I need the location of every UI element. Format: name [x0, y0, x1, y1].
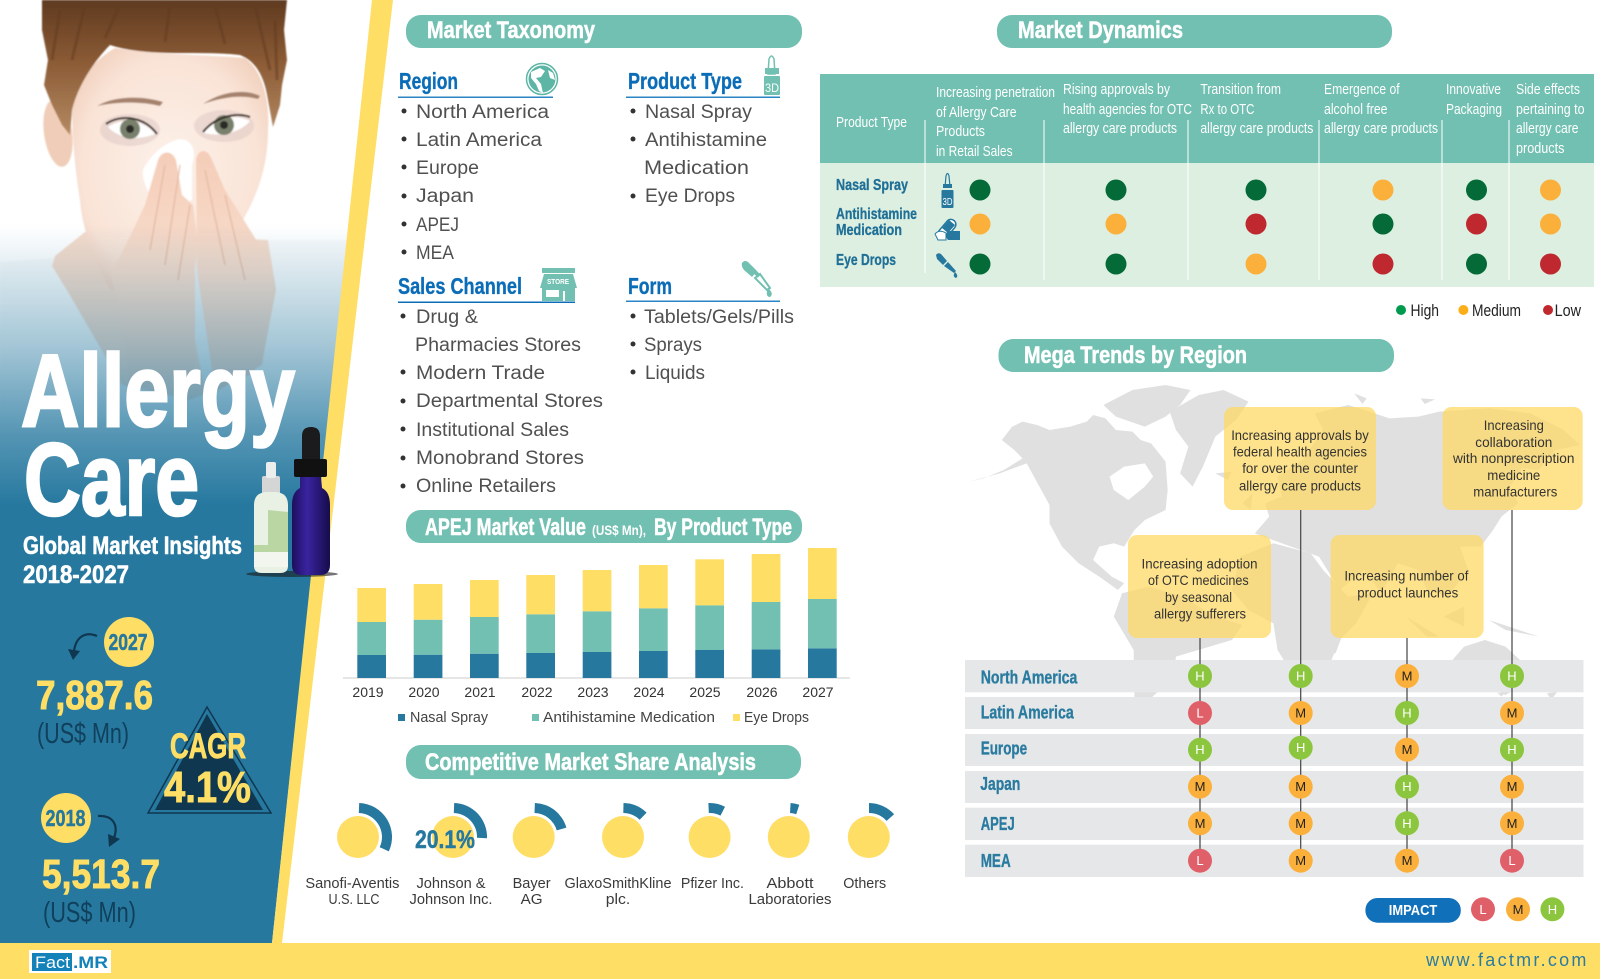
table header labels: Side effects — [1516, 81, 1580, 98]
callout: approvals by federal health agencies: federal health agencies — [1233, 444, 1367, 460]
impact row: Japan: M — [1195, 779, 1205, 794]
list: regions: MEA — [416, 243, 454, 264]
x axis years: 2020 — [408, 684, 440, 700]
arrow: curved to 2027 value — [68, 634, 97, 660]
list: product types: Medication — [644, 158, 749, 179]
table header labels — [836, 81, 1584, 160]
list: sales channels: Departmental Stores — [416, 391, 603, 412]
impact row: APEJ — [1188, 811, 1524, 835]
impact row: Latin America — [1188, 701, 1524, 725]
heading: Mega Trends by Region: Mega Trends by Region — [1024, 342, 1247, 369]
region labels: MEA — [981, 851, 1011, 871]
logo: Fact.MR — [29, 950, 111, 973]
donut: Johnson and Johnson: Johnson & — [416, 875, 486, 892]
list: regions: APEJ — [416, 215, 459, 236]
panel: Region: Region — [399, 68, 458, 94]
table row labels: Antihistamine — [836, 206, 917, 223]
callout: collaboration with manufacturers: with nonprescription — [1452, 450, 1574, 466]
x axis years: 2021 — [464, 684, 496, 700]
2018 badge: 2018 — [46, 805, 86, 831]
subtitle: 2018-2027 — [23, 561, 129, 589]
impact row: North America: H — [1296, 668, 1305, 684]
heading: APEJ Market Value — [406, 510, 802, 543]
list: sales channels: Institutional Sales — [416, 420, 569, 441]
legend: High Medium Low: High — [1410, 301, 1439, 320]
impact row: MEA: M — [1295, 853, 1306, 868]
callout: collaboration with manufacturers — [1442, 407, 1583, 510]
donut: Bayer: Bayer — [513, 875, 551, 892]
list: forms: Liquids — [645, 363, 705, 384]
impact row: Japan — [1188, 775, 1524, 799]
list: product types: Antihistamine — [645, 130, 767, 151]
callout: collaboration with manufacturers: medicine — [1487, 467, 1540, 483]
impact row: Latin America: L — [1196, 706, 1204, 720]
icon: nasal spray: 3D — [942, 197, 952, 208]
table header labels: health agencies for OTC — [1063, 101, 1192, 118]
callout: approvals by federal health agencies: allergy care products — [1239, 478, 1361, 494]
impact row: MEA: L — [1508, 853, 1516, 868]
table header labels: Emergence of — [1324, 81, 1400, 98]
impact row: Europe: H — [1507, 742, 1517, 757]
impact row: Japan: M — [1507, 779, 1517, 794]
callout: product launches — [1331, 535, 1484, 638]
list: sales channels: Modern Trade — [416, 363, 545, 384]
table header labels: Packaging — [1446, 101, 1502, 118]
impact row: Japan: M — [1295, 779, 1306, 794]
stat: 2027 value: (US$ Mn) — [37, 718, 129, 750]
callout: CAGR triangle: CAGR — [170, 727, 246, 766]
callout: adoption of OTC medicines — [1128, 535, 1271, 638]
donut: Sanofi-Aventis: U.S. LLC — [328, 891, 380, 908]
impact row: Japan: H — [1402, 779, 1412, 794]
connector lines — [1199, 510, 1513, 860]
region labels: North America — [981, 667, 1078, 687]
panel: Sales Channel — [398, 268, 603, 497]
impact row: Europe: M — [1402, 742, 1412, 757]
callout: approvals by federal health agencies: for over the counter — [1242, 460, 1358, 476]
subtitle: Global Market Insights — [23, 532, 242, 560]
heading: APEJ Market Value: APEJ Market Value — [425, 514, 586, 541]
x axis years: 2027 — [802, 684, 834, 700]
2027 badge: 2027 — [108, 629, 148, 655]
impact row: MEA: M — [1402, 853, 1412, 868]
impact row: Europe: H — [1296, 740, 1305, 755]
title: Allergy Care: Allergy — [21, 333, 295, 448]
table header labels: Increasing penetration — [936, 84, 1055, 101]
list: sales channels: Monobrand Stores — [416, 448, 584, 469]
legend: impact — [1365, 897, 1564, 923]
icon: store — [540, 268, 577, 301]
panel: Product Type — [626, 56, 780, 207]
stat: 2018 value: 5,513.7 — [42, 851, 160, 897]
panel: region rows — [965, 660, 1584, 877]
legend: impact: IMPACT — [1389, 902, 1437, 919]
callout: product launches: Increasing number of — [1344, 568, 1468, 584]
panel: Sales Channel: Sales Channel — [398, 273, 522, 299]
heading: Competitive Market Share Analysis: Competitive Market Share Analysis — [425, 749, 756, 776]
region labels: APEJ — [981, 814, 1015, 834]
impact row: Europe: H — [1195, 742, 1205, 757]
impact row: Latin America: M — [1295, 706, 1306, 720]
chart legend — [398, 709, 809, 726]
region labels: Japan — [980, 774, 1020, 794]
heading: Market Taxonomy — [406, 15, 802, 48]
heading: Market Taxonomy: Market Taxonomy — [427, 17, 596, 44]
chart legend: Antihistamine Medication — [543, 709, 715, 726]
x axis years: 2022 — [521, 684, 553, 700]
x axis years: 2025 — [689, 684, 721, 700]
map: world background — [969, 385, 1580, 700]
callout: adoption of OTC medicines: by seasonal — [1165, 589, 1232, 605]
bar chart: APEJ market value — [343, 548, 850, 726]
heading: Mega Trends by Region — [998, 339, 1394, 372]
stat: 2018 value: (US$ Mn) — [43, 897, 136, 929]
table: market dynamics — [820, 74, 1594, 287]
list: product types: Eye Drops — [645, 186, 735, 207]
callout: product launches: product launches — [1357, 585, 1458, 601]
donut: Sanofi-Aventis — [305, 803, 399, 908]
heading: APEJ Market Value: By Product Type — [654, 514, 792, 541]
region labels: Europe — [981, 739, 1027, 759]
panel: Form — [626, 261, 794, 384]
list: forms: Sprays — [644, 335, 702, 356]
table header labels: Product Type — [836, 114, 907, 131]
table header labels: allergy care products — [1063, 120, 1177, 137]
list: sales channels — [400, 307, 603, 497]
impact row: North America: H — [1195, 668, 1205, 684]
list: regions: Europe — [416, 158, 479, 179]
impact row: Latin America: H — [1402, 706, 1412, 720]
impact row: North America: M — [1402, 668, 1412, 684]
impact row: APEJ: H — [1402, 816, 1412, 831]
footer bar — [0, 943, 1600, 979]
impact row: APEJ: M — [1195, 816, 1205, 831]
donut: Johnson and Johnson — [410, 803, 492, 908]
panel: Product Type: Product Type — [628, 68, 742, 94]
table header labels: pertaining to — [1516, 101, 1584, 118]
callout: adoption of OTC medicines: Increasing adoption — [1142, 556, 1258, 572]
icon: globe — [526, 64, 558, 94]
icon: nasal spray bottle: 3D — [765, 81, 779, 95]
callout: collaboration with manufacturers: manufacturers — [1473, 484, 1557, 500]
icon: nasal spray bottle — [764, 56, 780, 95]
donut: Abbott — [748, 803, 832, 908]
legend: impact: L — [1479, 902, 1487, 917]
region labels: Latin America — [981, 703, 1074, 723]
x axis years: 2024 — [633, 684, 665, 700]
table header labels: Rx to OTC — [1200, 101, 1255, 118]
table header labels: alcohol free — [1324, 101, 1388, 118]
table header labels: products — [1516, 140, 1564, 157]
photo: woman holding a tissue — [0, 0, 350, 505]
impact row: APEJ: M — [1507, 816, 1517, 831]
table header labels: allergy care products — [1200, 120, 1313, 137]
impact row: Europe — [1188, 736, 1524, 762]
donut: Others: Others — [843, 875, 886, 892]
impact matrix: trend by region — [1188, 664, 1524, 873]
list: regions: Japan — [416, 186, 474, 207]
table header labels: Rising approvals by — [1063, 81, 1170, 98]
title: Allergy Care: Care — [24, 422, 199, 537]
icon: eye dropper — [936, 253, 957, 278]
list: forms: Tablets/Gels/Pills — [644, 307, 794, 328]
x axis years: 2023 — [577, 684, 609, 700]
table header labels: of Allergy Care — [936, 104, 1017, 121]
legend: High Medium Low: Medium — [1472, 301, 1521, 320]
heading: Market Dynamics — [997, 15, 1392, 48]
chart legend: Eye Drops — [744, 709, 809, 726]
callout: approvals by federal health agencies: Increasing approvals by — [1231, 427, 1369, 443]
impact row: MEA — [1188, 849, 1524, 873]
x axis years: 2026 — [746, 684, 778, 700]
heading: APEJ Market Value: (US$ Mn), — [592, 522, 646, 538]
yellow diagonal stripe — [272, 0, 393, 943]
impact row: MEA: L — [1196, 853, 1204, 868]
donut: Bayer: AG — [521, 891, 543, 908]
title: Allergy Care — [21, 333, 295, 537]
chart legend: Nasal Spray — [410, 709, 488, 726]
donut: GlaxoSmithKline: GlaxoSmithKline — [564, 875, 672, 892]
legend: High Medium Low — [1396, 301, 1582, 320]
stat: 2018 value — [41, 793, 160, 929]
table header labels: in Retail Sales — [936, 143, 1013, 160]
callout: approvals by federal health agencies — [1224, 407, 1376, 510]
impact row: North America — [1188, 664, 1524, 688]
table row labels: Nasal Spray — [836, 177, 908, 194]
donut: Pfizer — [681, 803, 744, 892]
icon: product bottles — [246, 427, 338, 577]
stat: 2027 value — [36, 617, 154, 750]
logo: Fact.MR: Fact — [35, 953, 70, 972]
x axis years — [352, 684, 834, 700]
logo: Fact.MR: .MR — [73, 953, 108, 972]
impact row: Latin America: M — [1507, 706, 1517, 720]
website url: www.factmr.com — [1425, 950, 1586, 970]
donut: Sanofi-Aventis: Sanofi-Aventis — [305, 875, 399, 892]
icon: dropper — [742, 261, 772, 297]
donut: Pfizer: Pfizer Inc. — [681, 875, 744, 892]
legend: impact: M — [1513, 902, 1523, 917]
legend: High Medium Low: Low — [1555, 301, 1582, 320]
subtitle — [23, 532, 242, 589]
impact row: North America: H — [1507, 668, 1517, 684]
callout: adoption of OTC medicines: allergy sufferers — [1154, 606, 1246, 622]
region labels — [980, 667, 1078, 871]
callout: adoption of OTC medicines: of OTC medicines — [1148, 572, 1249, 588]
panel: competitive share donuts — [305, 803, 894, 908]
table row labels: Medication — [836, 222, 902, 239]
left hero panel — [0, 0, 393, 943]
donut: GlaxoSmithKline — [564, 803, 672, 908]
list: forms — [630, 307, 794, 384]
list: regions — [402, 102, 549, 264]
table row labels: Eye Drops — [836, 252, 896, 269]
impact row: APEJ: M — [1295, 816, 1306, 831]
callout: CAGR triangle — [148, 707, 271, 813]
callout: CAGR triangle: 4.1% — [164, 763, 251, 812]
list: regions: North America — [416, 102, 549, 123]
stat: 2027 value: 7,887.6 — [36, 672, 153, 718]
list: regions: Latin America — [416, 130, 542, 151]
table header labels: allergy care — [1516, 120, 1578, 137]
donut: GlaxoSmithKline: plc. — [606, 891, 630, 908]
donut: Abbott: Abbott — [766, 875, 814, 892]
list: product types: Nasal Spray — [645, 102, 753, 123]
list: sales channels: Drug & — [416, 307, 478, 328]
donut: Johnson and Johnson: 20.1% — [415, 826, 475, 854]
panel: Region — [398, 64, 558, 264]
donut: Bayer — [513, 803, 566, 908]
icon: capsule and pill — [935, 217, 960, 241]
list: sales channels: Pharmacies Stores — [415, 335, 581, 356]
rating dots row: Antihistamine Medication — [970, 214, 1561, 234]
rating dots row: Nasal Spray — [970, 180, 1561, 200]
table header labels: Innovative — [1446, 81, 1501, 98]
table header labels: allergy care products — [1324, 120, 1438, 137]
table header labels: Transition from — [1200, 81, 1281, 98]
donut: Johnson and Johnson: Johnson Inc. — [410, 891, 492, 908]
list: product types — [630, 102, 767, 207]
arrow: curved to 2018 value — [98, 816, 120, 847]
table header labels: Products — [936, 123, 985, 140]
callout: collaboration with manufacturers: collaboration — [1475, 434, 1552, 450]
x axis years: 2019 — [352, 684, 384, 700]
icon: nasal spray — [942, 174, 954, 208]
legend: impact: H — [1548, 902, 1557, 917]
table row labels — [836, 177, 917, 269]
icon: store: STORE — [547, 279, 569, 286]
panel: Form: Form — [628, 273, 672, 299]
donut: Abbott: Laboratories — [748, 891, 832, 908]
callout: collaboration with manufacturers: Increasing — [1484, 417, 1544, 433]
list: sales channels: Online Retailers — [416, 476, 556, 497]
donut: Others — [843, 803, 894, 892]
bars 2019 to 2027 — [357, 548, 837, 678]
blue fade panel — [0, 225, 349, 943]
heading: Market Dynamics: Market Dynamics — [1018, 17, 1183, 44]
rating dots row: Eye Drops — [970, 254, 1561, 274]
